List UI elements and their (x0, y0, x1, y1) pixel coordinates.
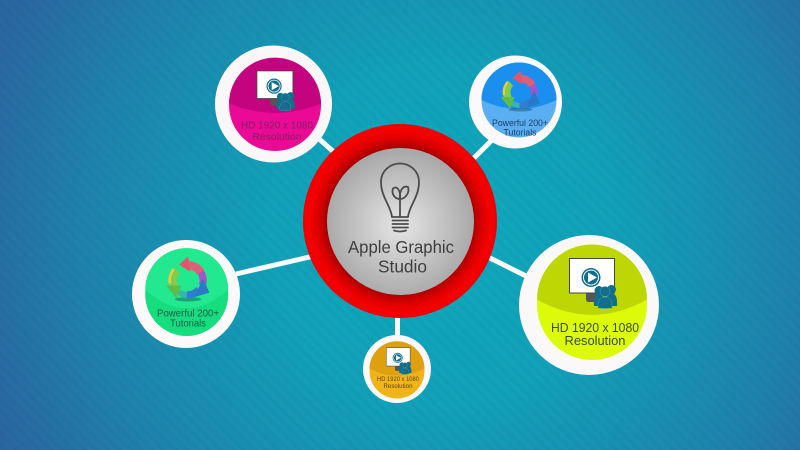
node: lime resolution (519, 235, 659, 375)
node: amber resolution (363, 335, 431, 403)
icon: cycle arrows (500, 70, 540, 112)
label: Powerful 200+ (492, 118, 548, 128)
central hub (303, 124, 497, 318)
node: magenta resolution (215, 46, 332, 162)
label: Tutorials (504, 128, 537, 138)
connector lines (236, 138, 530, 340)
label: Resolution (384, 383, 413, 390)
node: green tutorials (132, 240, 240, 348)
icon: monitor with play (570, 258, 617, 308)
hub label: Studio (378, 256, 427, 276)
label: Resolution (564, 333, 626, 348)
icon: cycle arrows (166, 256, 209, 301)
node: blue tutorials (469, 56, 562, 148)
hub label (348, 237, 454, 276)
label (492, 118, 548, 138)
red ring (303, 124, 497, 318)
icon: monitor with play (257, 71, 295, 111)
label (241, 120, 313, 143)
label: Tutorials (170, 319, 206, 330)
grey disc (327, 148, 474, 295)
icon: monitor with play (386, 348, 412, 374)
label: Powerful 200+ (157, 309, 219, 320)
label: HD 1920 x 1080 (551, 320, 639, 335)
icon: light bulb (381, 164, 419, 232)
label: HD 1920 x 1080 (377, 376, 420, 383)
hub label: Apple Graphic (348, 237, 454, 257)
label (377, 376, 420, 390)
label: Resolution (252, 131, 302, 143)
label: HD 1920 x 1080 (241, 120, 313, 132)
label (157, 309, 219, 330)
label (551, 320, 639, 348)
